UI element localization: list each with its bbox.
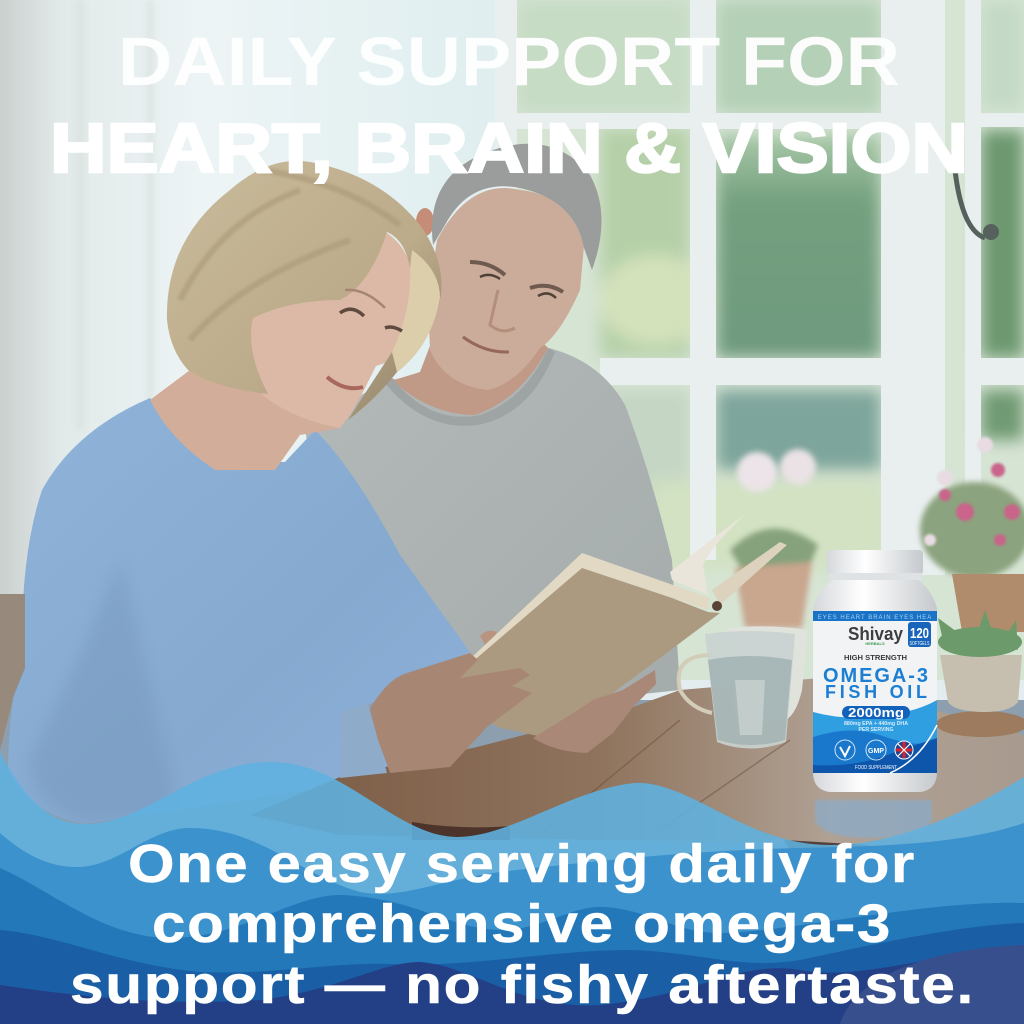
dose pill: 2000mg: [848, 705, 904, 720]
book cover: [443, 563, 720, 738]
back hand thumb: [480, 631, 497, 648]
bottle cap: [827, 550, 923, 581]
label: FOOD SUPPLEMENT: [855, 765, 897, 771]
bottom message: support — no fishy aftertaste.: [70, 955, 975, 1015]
badge icons: GMP: [868, 748, 884, 755]
man in grey sweater: [305, 144, 680, 720]
sleeve cuff: [340, 703, 387, 778]
wooden table: [250, 678, 1024, 860]
label: HERBALS: [865, 641, 885, 646]
mug and water glass: [679, 626, 808, 748]
title: HEART, BRAIN & VISION: [50, 109, 968, 187]
bottom message: comprehensive omega-3: [152, 894, 892, 954]
bottom waves: [0, 752, 1024, 1024]
brand: Shivay: [848, 624, 903, 644]
chair back: [0, 594, 25, 750]
title: [50, 23, 968, 187]
bottom message: [70, 834, 975, 1015]
title: DAILY SUPPORT FOR: [118, 23, 900, 100]
plant and vase on window sill: [730, 449, 818, 628]
bottle body: [813, 580, 937, 792]
label: PER SERVING: [858, 727, 894, 733]
label: 880mg EPA + 440mg DHA: [844, 721, 908, 727]
left hand: [368, 653, 532, 773]
bottle reflection: [815, 800, 932, 838]
softgel count badge: SOFTGELS: [910, 641, 930, 647]
badge icons: [835, 740, 913, 760]
flower pot right: [920, 437, 1024, 632]
softgel count badge: [908, 622, 931, 647]
label: OMEGA-3: [823, 665, 928, 687]
label: HIGH STRENGTH: [844, 653, 907, 662]
product bottle: [813, 550, 937, 792]
right hand: [533, 670, 656, 753]
bottom message: One easy serving daily for: [128, 834, 916, 894]
softgel count badge: 120: [910, 625, 929, 642]
label: [813, 611, 937, 773]
label: FISH OIL: [825, 682, 927, 702]
label: EYES HEART BRAIN EYES HEA: [818, 615, 932, 621]
open book with hands: [340, 512, 787, 778]
succulent pot on saucer: [936, 610, 1024, 737]
book pages: [670, 512, 748, 595]
woman in blue sweater: [8, 161, 470, 824]
label wave: [813, 700, 937, 773]
